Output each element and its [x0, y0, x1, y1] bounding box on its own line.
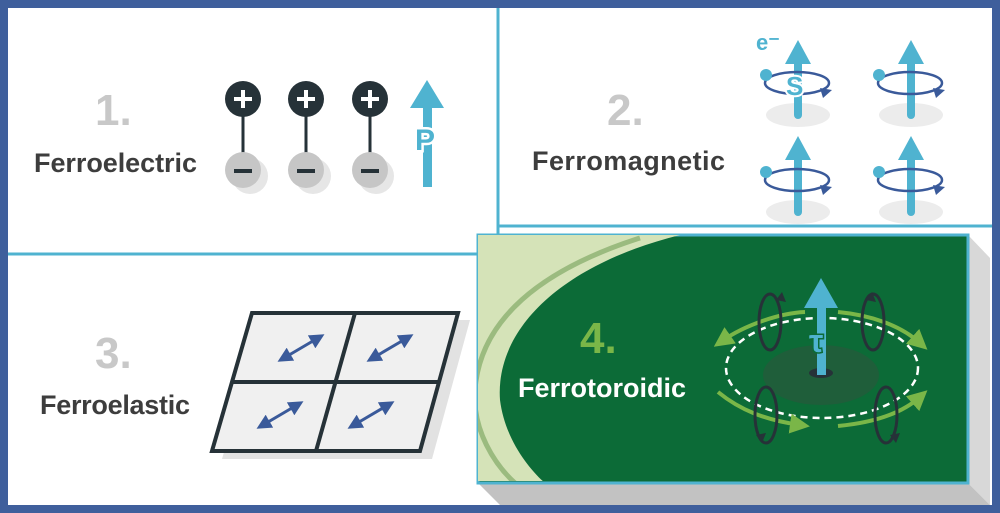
panel: ferromagnetic [532, 30, 945, 224]
icon: spins: S [786, 71, 803, 101]
icon: toroidal moment [718, 278, 920, 443]
icon: strained grid [212, 313, 470, 459]
heading ferroelastic: Ferroelastic [40, 390, 190, 420]
heading ferromagnetic: Ferromagnetic [532, 146, 725, 176]
number 4: 4. [580, 314, 617, 363]
number 2: 2. [607, 86, 644, 135]
panel: ferroelectric [34, 80, 444, 194]
heading ferrotoroidic: Ferrotoroidic [518, 373, 686, 403]
icon: spins: e⁻ [756, 30, 780, 55]
panel: ferrotoroidic [475, 235, 990, 505]
arrow P: P [415, 124, 435, 157]
icon: toroidal moment: τ [809, 323, 823, 359]
icon: dipoles [225, 81, 394, 194]
number 3: 3. [95, 329, 132, 378]
panel: ferroelastic [40, 313, 470, 459]
icon: spins [756, 30, 945, 224]
number 1: 1. [95, 86, 132, 135]
arrow P [410, 80, 444, 187]
heading ferroelectric: Ferroelectric [34, 148, 197, 178]
